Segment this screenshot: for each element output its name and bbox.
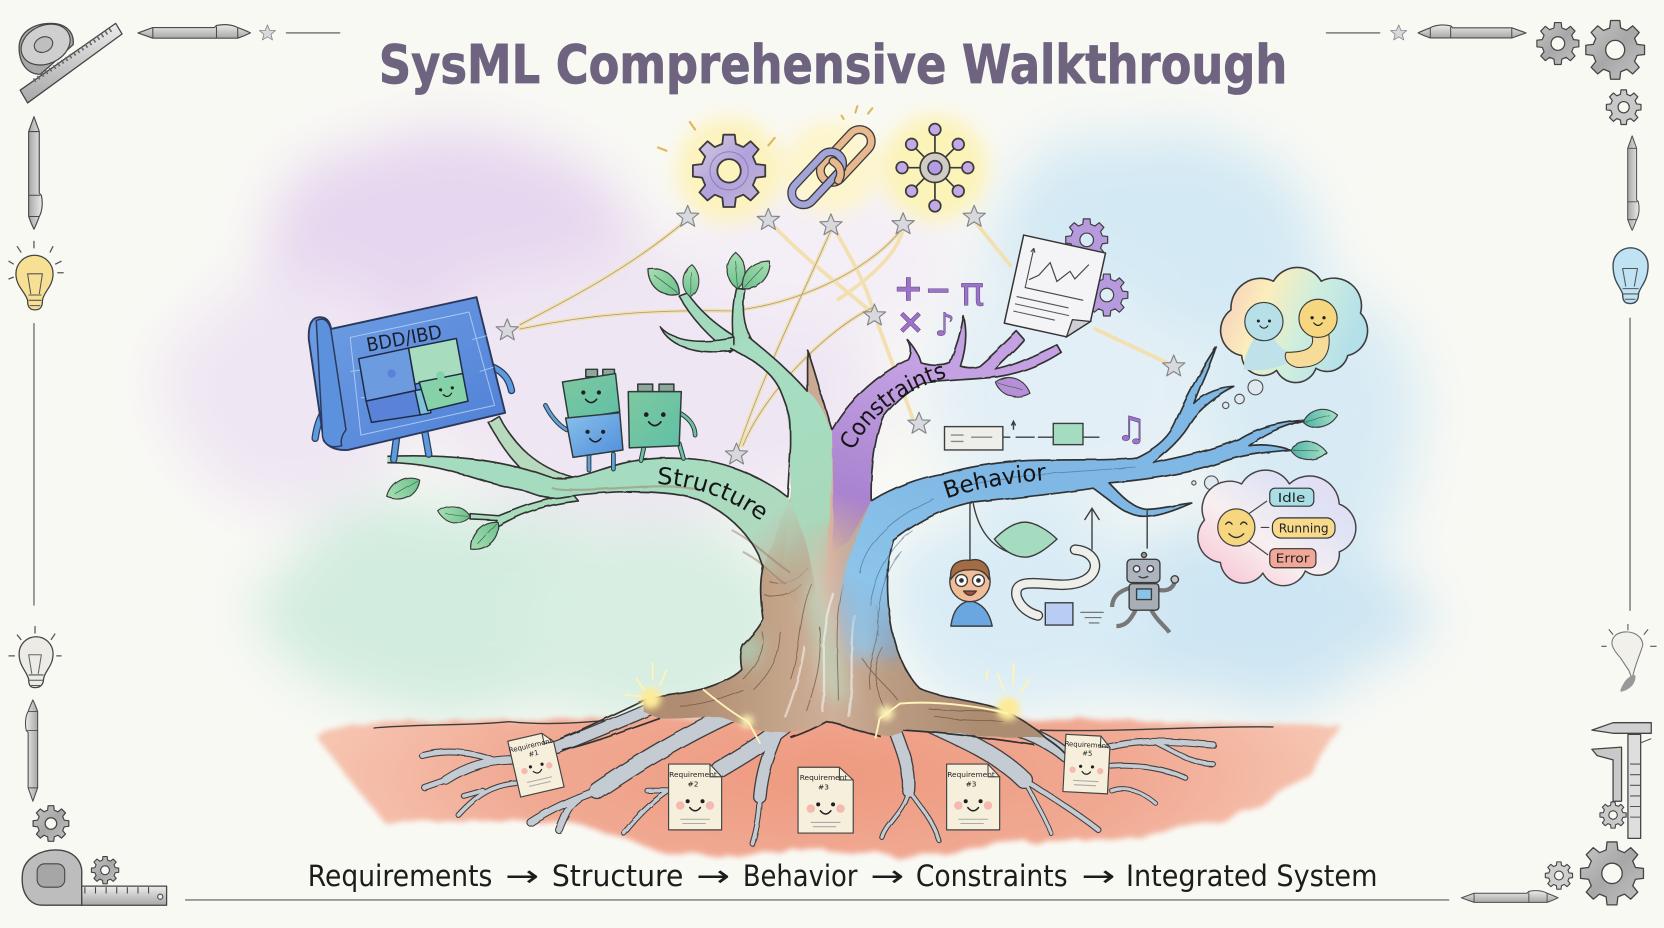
blue box (1045, 603, 1073, 625)
constraints math symbols: ♪ (934, 305, 955, 343)
icon: small star (1391, 25, 1407, 40)
icon: medium gear (1537, 23, 1579, 64)
icon: gear on tape (91, 857, 119, 884)
upper green limb with twigs (660, 289, 751, 352)
icon: tape roll and ruler (14, 16, 122, 103)
frame tools: bottom right (1461, 624, 1657, 905)
branch: Behavior (791, 347, 1339, 756)
icon: vertical pen (1628, 136, 1639, 230)
chart document sheet (1004, 235, 1106, 341)
constraints math symbols: π (960, 269, 984, 316)
icon: large gear (1586, 21, 1645, 79)
icon: caliper (1592, 723, 1651, 838)
constraints math symbols: − (925, 270, 951, 308)
lego legs and arms (545, 405, 695, 470)
speed lines (1080, 612, 1104, 623)
state: Error (1270, 549, 1316, 568)
up arrow (1085, 508, 1099, 550)
bottom flow caption: Constraints (916, 859, 1068, 894)
requirement doc 5 (1062, 734, 1110, 794)
state: Idle (1270, 488, 1314, 506)
lego block characters (545, 369, 695, 470)
icon: vertical pen (29, 117, 42, 229)
icon: small gear (33, 806, 69, 841)
small twig under blueprint (488, 416, 573, 490)
constraint document with gears (1004, 219, 1128, 341)
icon: outline bulb (8, 626, 62, 688)
trunk (643, 350, 1045, 738)
requirement documents (507, 731, 1110, 833)
star nodes (496, 205, 1185, 464)
leaf on constraints branch (993, 373, 1033, 401)
puzzle face (439, 386, 455, 398)
requirement doc 4: Requirement (947, 770, 995, 779)
requirement doc 1 (507, 731, 564, 797)
puzzle pieces (359, 339, 468, 422)
person with glasses (950, 560, 992, 626)
frame tools: bottom left (8, 626, 167, 905)
constellation lines linking stars (520, 221, 1169, 448)
block: top green (562, 369, 620, 420)
outline of green limbs (387, 336, 832, 750)
green state box (1053, 423, 1083, 445)
yellow friend (1285, 299, 1337, 368)
message box (944, 427, 1003, 450)
icon: tiny gear (1545, 862, 1573, 889)
requirement doc 5: Requirement (1064, 740, 1109, 750)
hanging lines (970, 503, 1147, 562)
state: Running (1272, 518, 1335, 538)
bottom flow caption: → (505, 859, 539, 894)
requirement doc 3: #3 (818, 783, 829, 792)
decision path and leaf diamond (973, 503, 1057, 557)
requirement doc 2: Requirement (669, 770, 717, 779)
requirement doc 1: #1 (528, 749, 539, 759)
soil band (314, 713, 1341, 856)
icon: gear (658, 122, 775, 207)
state arrows (1246, 501, 1269, 555)
bottom flow caption: Integrated System (1126, 859, 1377, 894)
blueprint limbs (315, 366, 512, 460)
thought cloud: connected friends (1192, 267, 1368, 490)
blueprint sheet (309, 297, 505, 450)
branch: Constraints (832, 316, 1061, 552)
icon: blue bulb (1613, 248, 1648, 304)
leaves on structure branch (383, 252, 776, 556)
icon: horizontal pen (138, 25, 250, 38)
music note: ♫ (1116, 409, 1146, 449)
behavior sequence row (944, 409, 1146, 450)
blue limb outline (791, 347, 1305, 756)
frame tools: top right (1391, 21, 1648, 304)
state: Error: Error (1276, 551, 1310, 566)
thought bubbles (1192, 380, 1263, 490)
requirement doc 2: #2 (688, 779, 698, 788)
purple limb outline (832, 316, 1061, 501)
lower leaf twig (470, 495, 578, 527)
state: Idle: Idle (1278, 491, 1306, 506)
blue friend (1244, 302, 1303, 371)
requirement doc 2 (669, 764, 722, 830)
bottom flow caption: Structure (552, 859, 683, 894)
constraints math symbols: × (896, 302, 925, 342)
icon: small gear (1606, 90, 1641, 124)
icon: horizontal pen (1461, 891, 1558, 902)
top concept icons (658, 106, 988, 223)
thought cloud: state machine (1198, 470, 1356, 586)
bottom flow caption: Requirements (308, 859, 492, 894)
purple gears behind document (1066, 219, 1128, 316)
block: lower blue (566, 413, 623, 457)
icon: horizontal pen (1418, 25, 1526, 38)
icon: glowing bulb (8, 241, 64, 310)
icon glow halos (676, 115, 988, 223)
leaves on behavior branch (1301, 406, 1339, 430)
bottom flow caption: → (1081, 859, 1115, 894)
constraints math symbols: + (893, 267, 924, 309)
requirement doc 4 (947, 764, 1000, 830)
connector with arrow (1003, 421, 1099, 437)
icon: small star (259, 25, 275, 40)
icon: large gear (1581, 842, 1643, 905)
requirement doc 3: Requirement (800, 773, 847, 782)
icon: network hub (896, 124, 974, 212)
state: Running: Running (1279, 522, 1329, 537)
S flow ribbon (1016, 550, 1095, 616)
icon: sketched bulb (1601, 624, 1657, 692)
constraints math symbols (893, 267, 984, 343)
title: SysML Comprehensive Walkthrough (379, 34, 1287, 96)
icon: small gear (1600, 802, 1626, 828)
label: Behavior: Behavior (943, 464, 1046, 498)
label BDD/IBD: BDD/IBD (364, 320, 444, 357)
running robot (1112, 552, 1178, 632)
main structure limb (387, 456, 817, 626)
requirement doc 5: #5 (1082, 749, 1093, 758)
behavior use case scene (950, 503, 1178, 632)
blueprint character BDD/IBD (309, 297, 512, 460)
icon: vertical pen (25, 700, 38, 801)
branch: Structure (383, 252, 832, 750)
bottom flow caption: → (696, 859, 730, 894)
label: Constraints: Constraints (841, 366, 946, 448)
icon: tape measure (22, 850, 167, 905)
requirement doc 1: Requirement (508, 737, 553, 755)
label: Structure: Structure (658, 467, 766, 520)
block: right green (628, 384, 681, 448)
bottom flow caption: Behavior (743, 859, 858, 894)
smiley (1218, 509, 1255, 546)
frame tools: top left (8, 16, 275, 310)
requirement doc 4: #3 (966, 779, 977, 788)
watercolor wash background (170, 133, 1427, 732)
roots (422, 709, 1213, 844)
icon: chain link (787, 106, 876, 210)
bottom flow caption: → (870, 859, 904, 894)
root sparkles (626, 663, 1029, 743)
requirement doc 3 (798, 767, 853, 833)
